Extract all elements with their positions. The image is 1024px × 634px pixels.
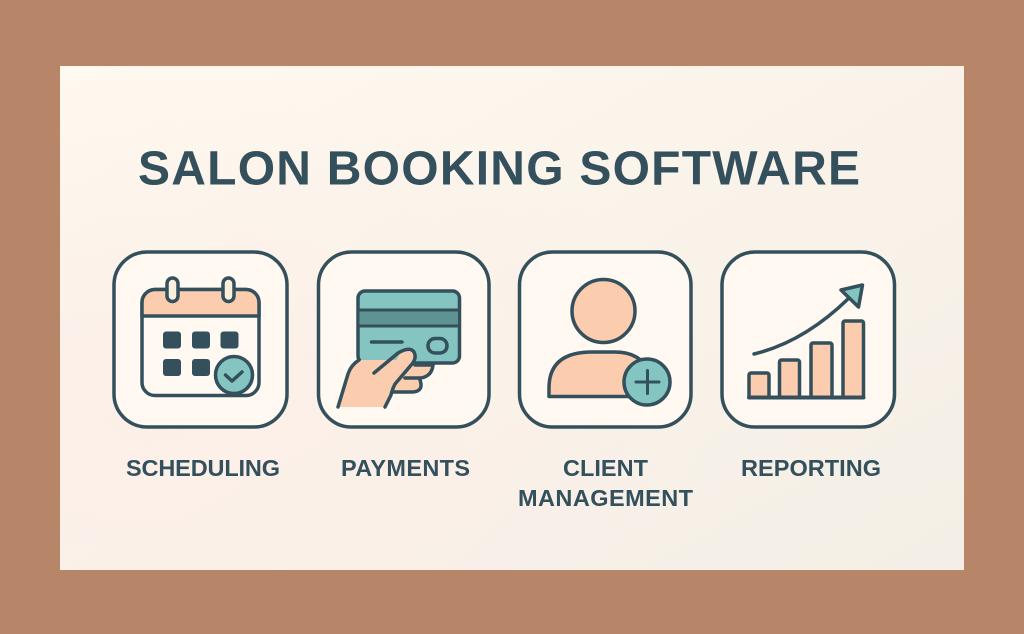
label: scheduling: SCHEDULING [126,455,280,481]
panel: client management [520,252,691,427]
label: client management: MANAGEMENT [518,485,694,511]
card: scheduling [114,252,287,427]
card: payments [318,252,489,427]
label: reporting: REPORTING [741,455,881,481]
icon: plus badge [624,359,670,405]
icon: check badge [216,356,252,394]
icon: calendar [142,278,259,396]
label: client management: CLIENT [563,455,649,481]
label: client management [518,455,694,511]
panel: scheduling [114,252,287,427]
icon: credit card [358,291,460,363]
panel: reporting [722,252,894,427]
icon: person [549,280,650,396]
bar chart [749,321,864,398]
card: reporting [722,252,894,427]
label: payments: PAYMENTS [341,455,470,481]
icon: hand [338,349,433,407]
title: SALON BOOKING SOFTWARE [138,142,860,196]
panel: payments [318,252,489,427]
icon: trend arrow [754,285,862,354]
card: client management [520,252,691,427]
main panel [60,66,964,570]
